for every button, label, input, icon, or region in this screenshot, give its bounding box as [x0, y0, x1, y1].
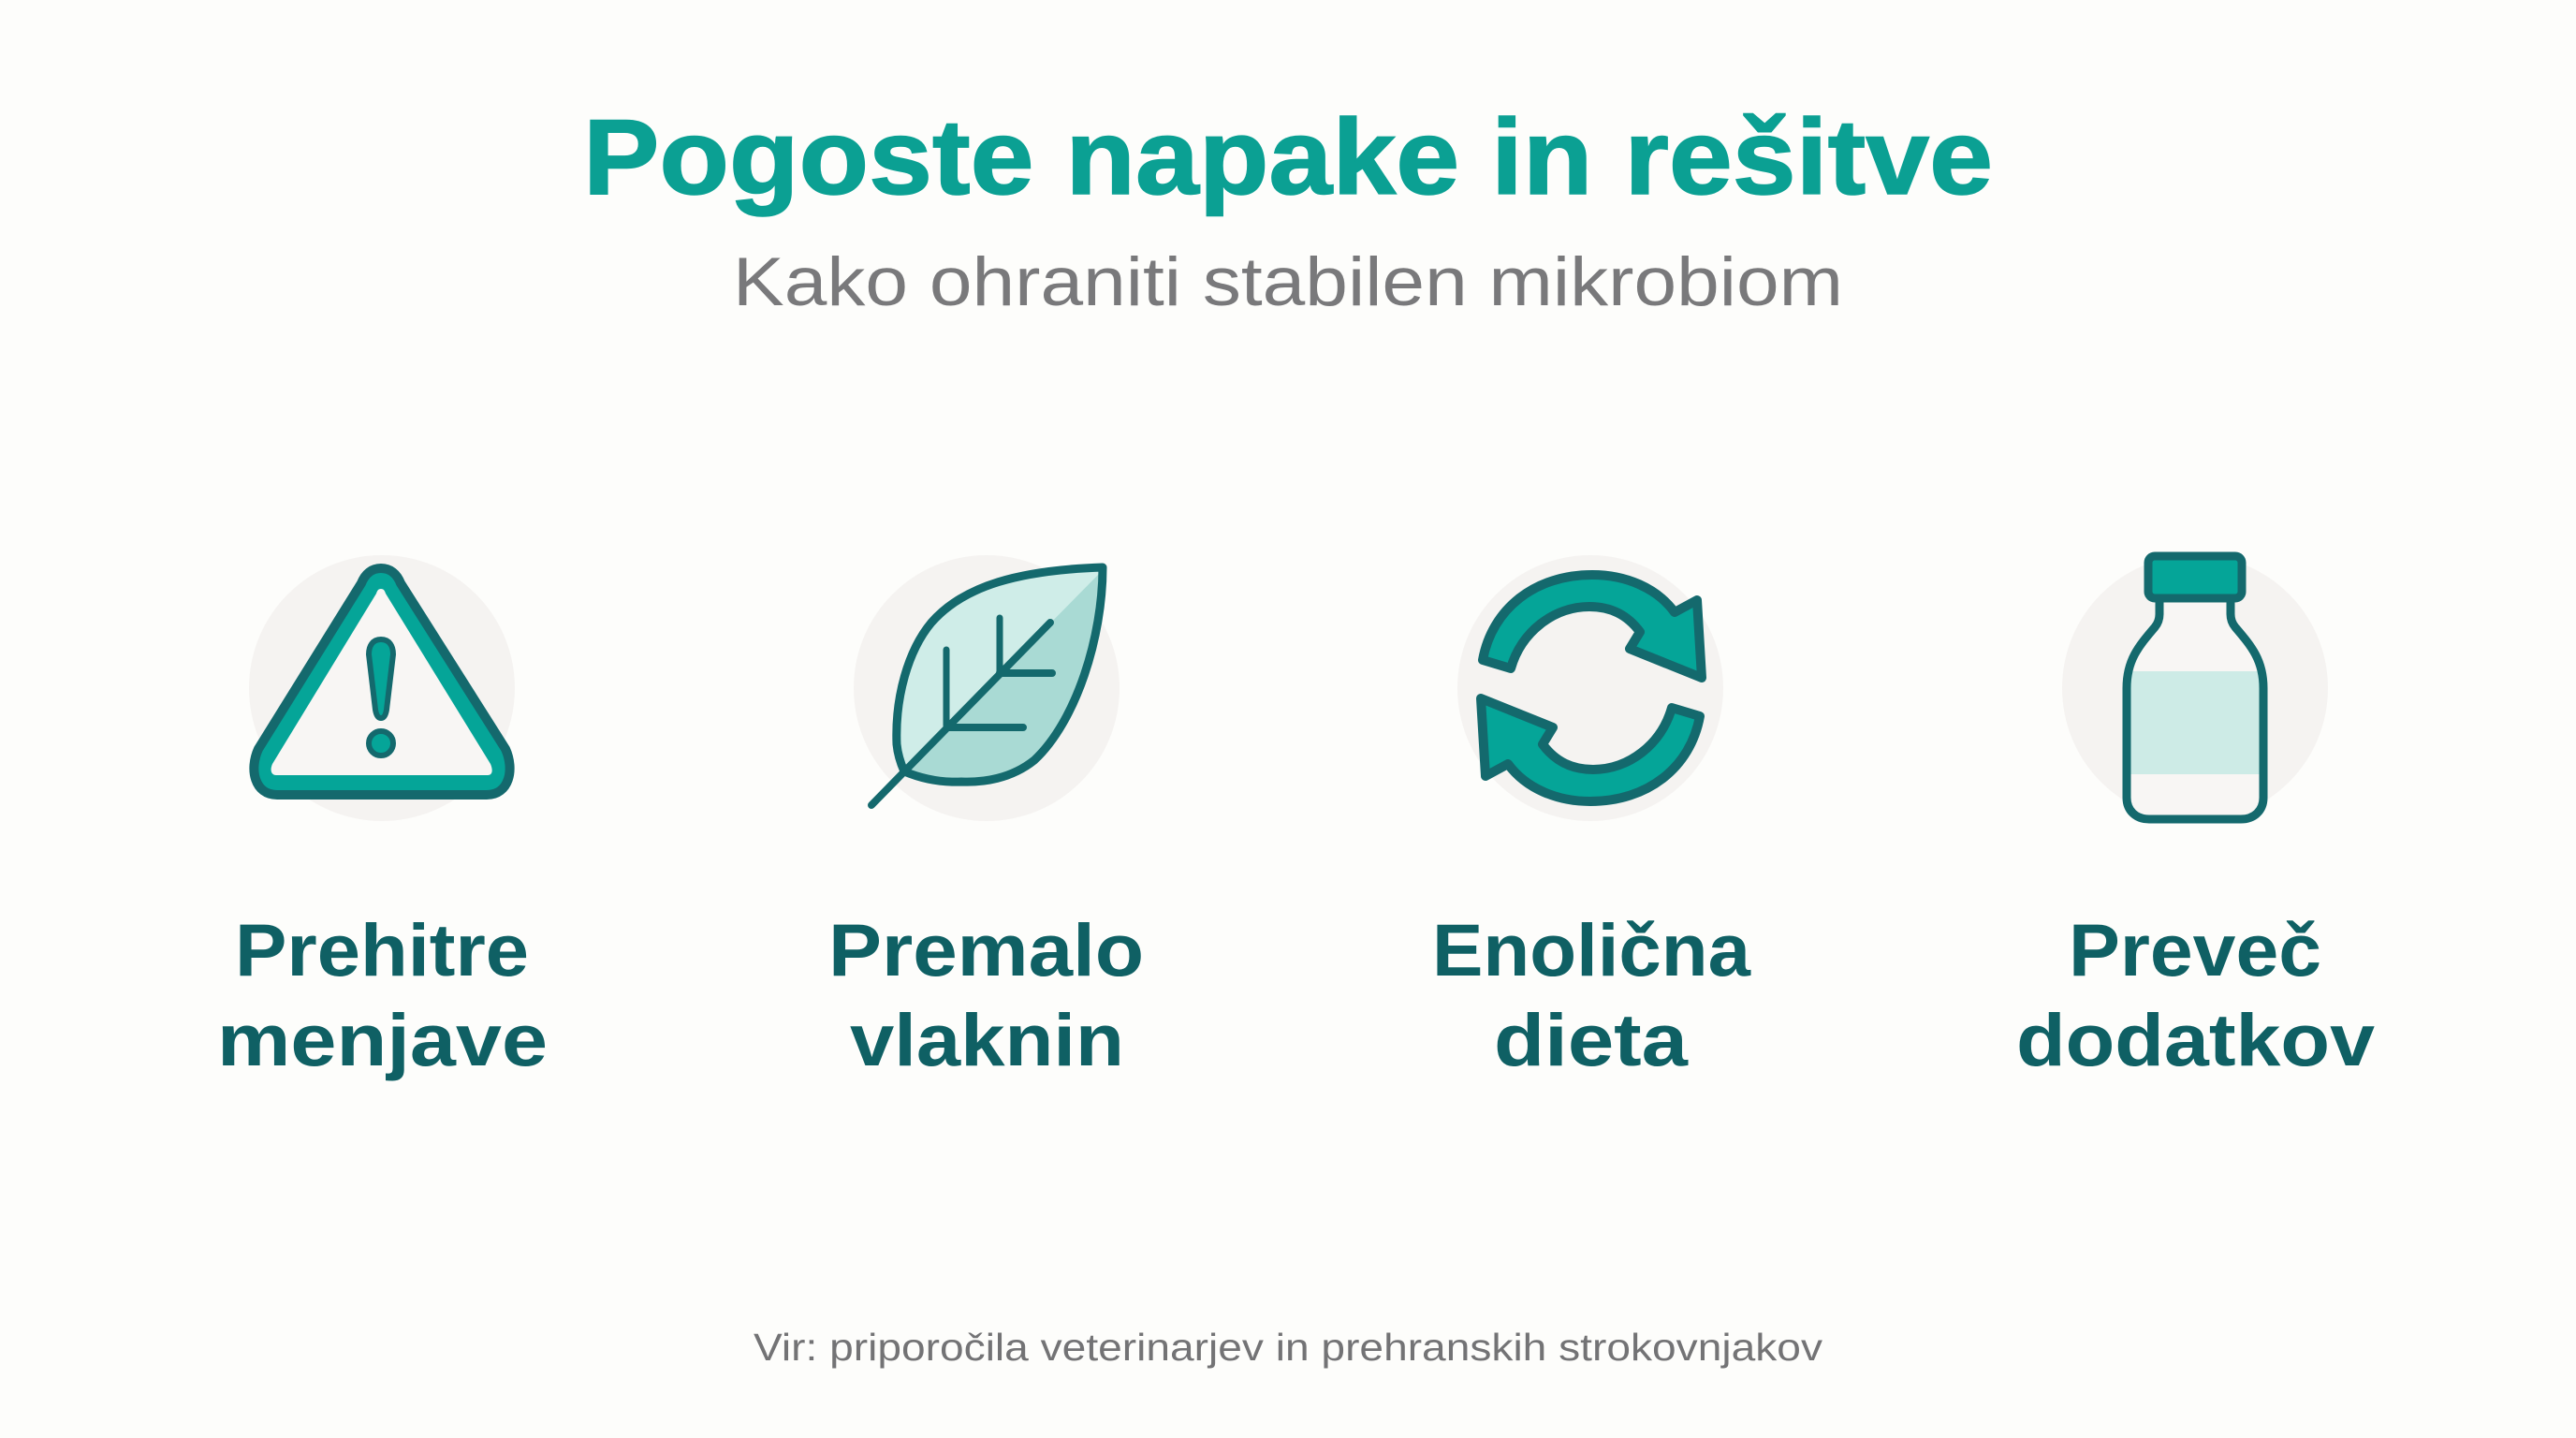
- label: Preveč dodatkov: [2016, 908, 2375, 1081]
- label: Premalo vlaknin: [828, 908, 1144, 1081]
- icon: leaf: [854, 555, 1120, 821]
- label: Prehitre menjave: menjave: [217, 998, 548, 1081]
- icon: supplement bottle: [2062, 555, 2328, 821]
- label: Enolična dieta: [1432, 908, 1751, 1081]
- label: Prehitre menjave: Prehitre: [235, 908, 529, 991]
- label: Enolična dieta: Enolična: [1432, 908, 1751, 991]
- subtitle: Kako ohraniti stabilen mikrobiom: [733, 244, 1843, 320]
- source note: Vir: priporočila veterinarjev in prehranskih strokovnjakov: [754, 1326, 1823, 1369]
- label: Premalo vlaknin: vlaknin: [850, 998, 1124, 1081]
- label: Premalo vlaknin: Premalo: [828, 908, 1144, 991]
- label: Preveč dodatkov: dodatkov: [2016, 998, 2375, 1081]
- title: Pogoste napake in rešitve: [583, 98, 1993, 217]
- icon: cycle arrows: [1457, 555, 1723, 821]
- label: Preveč dodatkov: Preveč: [2069, 908, 2321, 991]
- label: Prehitre menjave: [217, 908, 548, 1081]
- label: Enolična dieta: dieta: [1494, 998, 1689, 1081]
- icon: warning triangle: [249, 555, 515, 821]
